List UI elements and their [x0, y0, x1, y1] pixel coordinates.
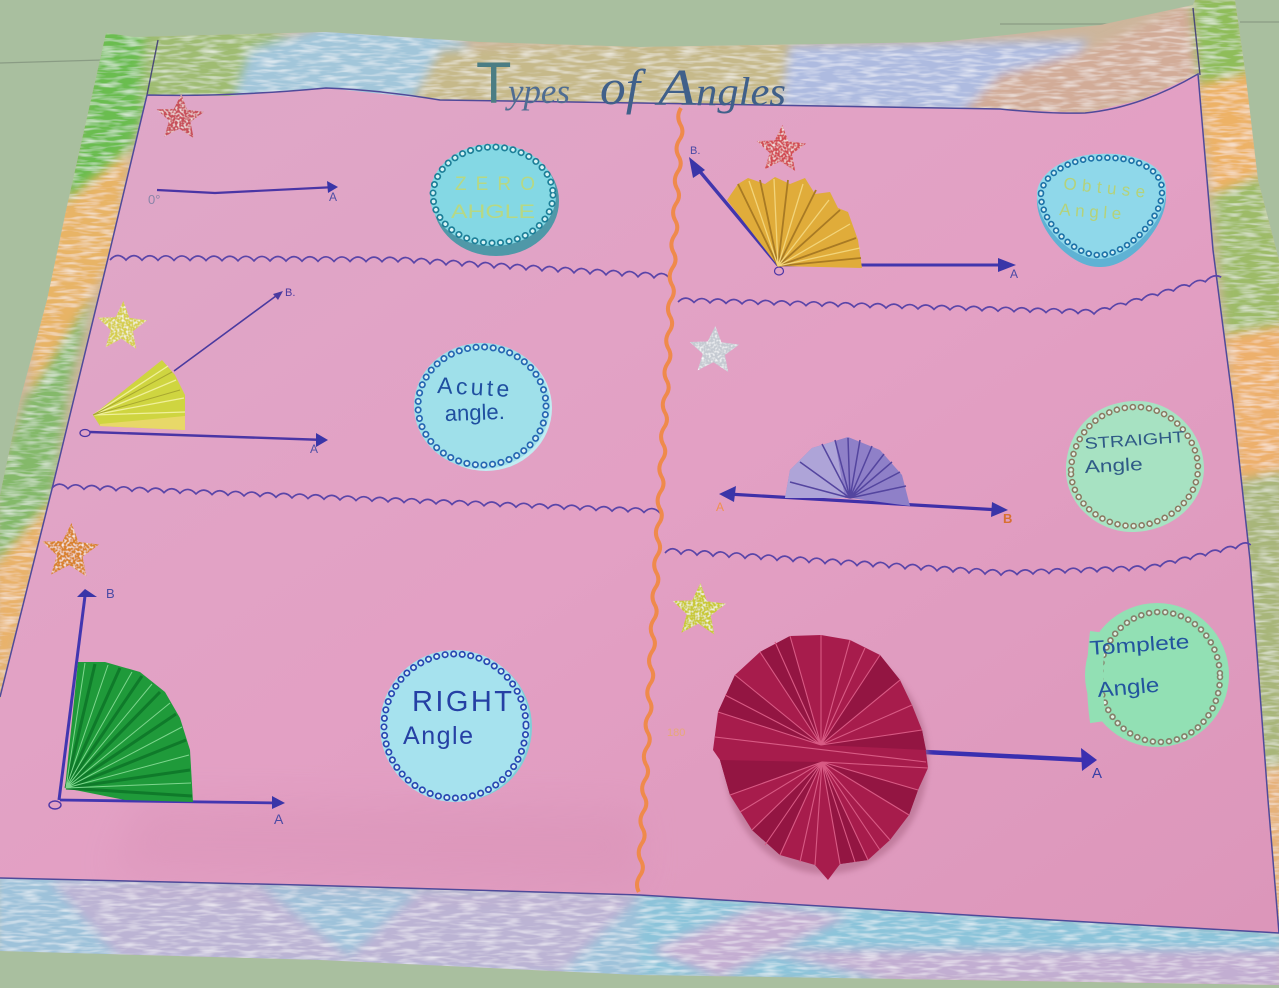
dark folds — [718, 636, 926, 864]
zero angle diagram: A — [329, 190, 337, 204]
title — [476, 51, 786, 117]
pen line at top-left corner — [147, 8, 1200, 95]
purple paper fan — [785, 437, 910, 506]
acute angle diagram: A — [310, 442, 318, 456]
title: ngles — [696, 69, 786, 114]
label circle: obtuse angle — [1037, 154, 1166, 267]
title: A — [654, 60, 696, 117]
red paper fan — [713, 635, 928, 880]
star: red, obtuse angle — [755, 124, 807, 171]
acute angle diagram — [80, 287, 328, 456]
obtuse angle diagram: A — [1010, 267, 1018, 281]
label circle: complete angle: Tomplete — [1089, 631, 1190, 660]
label circle: acute angle — [414, 343, 552, 471]
right angle diagram: A — [274, 811, 284, 827]
star: red, zero angle — [155, 93, 205, 139]
dividers: scalloped pen lines — [52, 256, 1251, 575]
green paper fan — [65, 662, 193, 802]
label circle: zero angle — [430, 144, 559, 256]
straight angle diagram: B — [1003, 511, 1012, 526]
label circle: right angle: Angle — [403, 722, 473, 750]
label circle: straight angle: STRAIGHT — [1084, 429, 1185, 453]
complete angle diagram: 180 — [667, 727, 685, 739]
orange paper fan — [727, 177, 862, 268]
label circle: complete angle — [1085, 603, 1229, 747]
label circle: right angle — [380, 650, 532, 802]
label circle: straight angle — [1066, 401, 1204, 532]
straight angle diagram: A — [716, 500, 724, 514]
right angle diagram — [49, 586, 285, 827]
label circle: acute angle: angle. — [444, 399, 505, 426]
fold lines — [715, 635, 928, 865]
star: orange, right angle — [40, 522, 100, 577]
obtuse angle diagram: B. — [690, 145, 700, 157]
label circle: obtuse angle: Obtuse — [1063, 174, 1146, 202]
title: T — [476, 51, 511, 116]
complete angle diagram: A — [1092, 765, 1102, 782]
acute angle diagram: B. — [285, 287, 295, 299]
zero angle diagram — [148, 181, 338, 207]
straight angle diagram — [716, 437, 1012, 526]
zero angle diagram: 0° — [148, 192, 160, 207]
label circle: zero angle: AHGLE — [451, 202, 535, 223]
obtuse angle diagram — [689, 145, 1018, 281]
fan shadow — [724, 646, 928, 874]
complete angle diagram — [667, 635, 1102, 880]
title: ypes — [505, 72, 570, 111]
soft shading — [110, 800, 640, 885]
label circle: obtuse angle: Angle — [1059, 200, 1122, 223]
title: of — [600, 59, 646, 115]
orange centre divider — [637, 108, 682, 892]
label circle: right angle: RIGHT — [412, 686, 512, 718]
label circle: complete angle: Angle — [1096, 674, 1160, 702]
star: gold, acute angle — [96, 300, 148, 349]
label circle: straight angle: Angle — [1084, 454, 1143, 477]
label circle: acute angle: Acute — [437, 372, 510, 402]
yellow paper fan — [93, 360, 185, 430]
right angle diagram: B — [106, 586, 115, 601]
star: gold, complete angle — [671, 582, 727, 635]
star: silver, straight angle — [688, 325, 740, 372]
label circle: zero angle: ZERO — [455, 174, 535, 195]
